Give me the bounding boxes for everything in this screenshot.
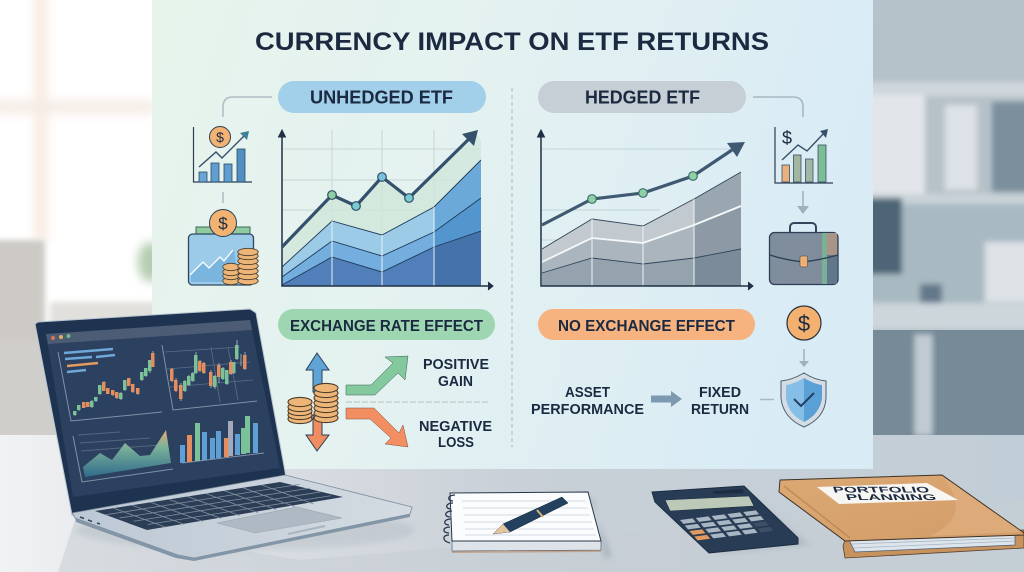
icon: shield with check	[781, 373, 826, 427]
connector: hedged heading to icon	[753, 97, 803, 117]
notebook with pen	[444, 492, 612, 558]
arrow: negative loss	[346, 408, 408, 447]
calculator	[652, 486, 810, 553]
icon: wallet with coins	[188, 210, 258, 285]
label: asset performance: PERFORMANCE	[531, 402, 644, 418]
label text: portfolio planning: PLANNING	[845, 494, 938, 502]
panel: hedged ETF heading: HEDGED ETF	[585, 86, 700, 108]
label: positive gain	[423, 357, 489, 390]
icon: coins with up and down arrows	[288, 353, 338, 451]
chart: hedged ETF layered area	[538, 130, 753, 290]
icon: hedged growth chart	[775, 127, 833, 183]
icon: dollar coin	[787, 306, 821, 340]
arrow: performance to return	[651, 391, 682, 407]
mini bar chart	[180, 416, 258, 463]
label: negative loss	[419, 419, 492, 451]
panel: hedged ETF heading	[538, 81, 746, 113]
candlesticks	[73, 340, 246, 416]
panel: no exchange effect heading: NO EXCHANGE EFFECT	[558, 318, 735, 335]
arrow: coin to shield	[799, 349, 809, 367]
label: fixed return: RETURN	[691, 402, 749, 418]
laptop	[35, 309, 415, 561]
arrow: chart to briefcase	[797, 191, 809, 214]
label: negative loss: NEGATIVE	[419, 419, 492, 435]
label text: portfolio planning	[832, 486, 938, 502]
label: negative loss: LOSS	[438, 435, 474, 451]
connector: unhedged heading to icon	[223, 97, 272, 203]
label: positive gain: GAIN	[438, 374, 473, 390]
panel: unhedged ETF heading	[278, 81, 486, 113]
desk surface	[0, 435, 1024, 572]
label: fixed return	[691, 385, 749, 418]
icon: growth chart with dollar coin: $	[216, 129, 224, 145]
mini area chart	[78, 430, 171, 477]
laptop screen	[35, 309, 286, 515]
panel: exchange rate effect heading: EXCHANGE RATE EFFECT	[290, 318, 483, 335]
icon: briefcase	[770, 223, 838, 284]
chart: unhedged ETF layered area	[278, 130, 493, 290]
title: CURRENCY IMPACT ON ETF RETURNS	[255, 28, 769, 56]
icon: wallet with coins: $	[218, 214, 228, 233]
pen	[493, 497, 568, 534]
icon: hedged growth chart: $	[782, 128, 792, 148]
label text: portfolio planning: PORTFOLIO	[832, 486, 931, 495]
panel: no exchange effect heading	[538, 309, 755, 340]
binder: portfolio planning	[779, 475, 1024, 558]
label: fixed return: FIXED	[699, 385, 741, 401]
panel: unhedged ETF heading: UNHEDGED ETF	[310, 86, 453, 108]
label: asset performance: ASSET	[565, 385, 610, 401]
icon: dollar coin: $	[798, 311, 810, 336]
laptop base and keyboard	[72, 475, 412, 561]
arrow: positive gain	[346, 356, 408, 395]
panel: infographic board	[152, 0, 873, 469]
panel: exchange rate effect heading	[278, 309, 495, 340]
label: positive gain: POSITIVE	[423, 357, 489, 373]
icon: growth chart with dollar coin	[194, 126, 252, 182]
label: asset performance	[531, 385, 644, 418]
